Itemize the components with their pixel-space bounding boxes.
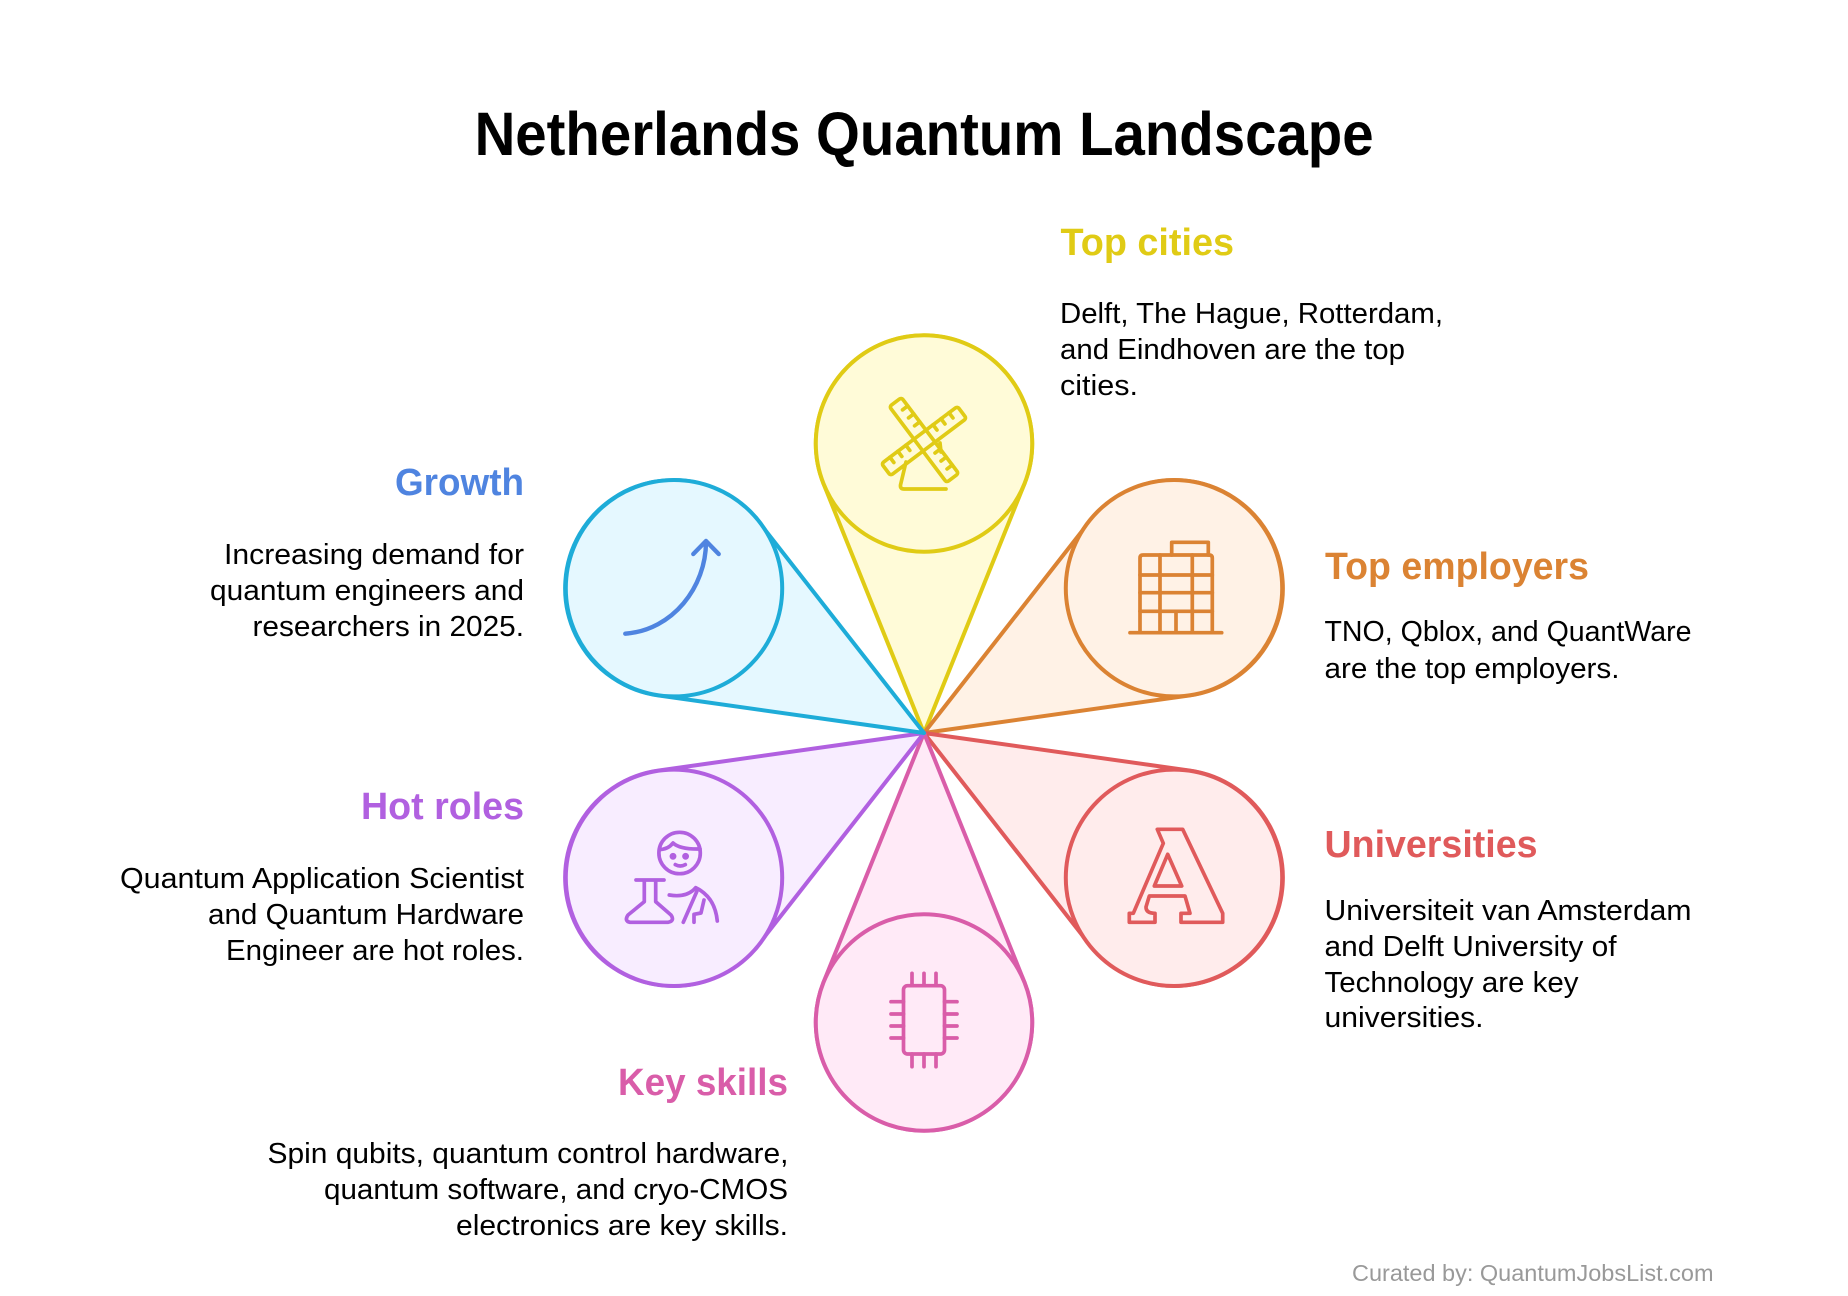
description: growth: quantum engineers and [210,575,524,607]
description: top employers [1324,616,1692,685]
description: top cities: cities. [1060,370,1138,402]
petal shape: blue [526,440,978,827]
description: hot roles [120,863,524,967]
text block: hot roles [120,786,524,967]
heading: hot roles: Hot roles [361,786,524,828]
heading: top cities: Top cities [1060,222,1234,264]
panel: hot roles petal [526,639,978,1026]
panel: key skills petal [816,733,1032,1131]
description: top employers: TNO, Qblox, and QuantWare [1324,616,1692,648]
description: hot roles: Quantum Application Scientist [120,863,524,895]
petal shape: orange [870,440,1322,827]
description: universities: Technology are key [1324,967,1579,999]
description: growth: researchers in 2025. [252,611,524,643]
heading: growth: Growth [395,462,524,504]
petal shape: purple [526,639,978,1026]
description: universities: universities. [1324,1002,1484,1034]
icon: office building [1130,542,1222,633]
petal shape: yellow [816,335,1032,733]
description: top cities: Delft, The Hague, Rotterdam, [1060,298,1443,330]
text block: key skills [268,1062,788,1242]
description: top employers: are the top employers. [1324,653,1620,685]
panel: universities petal [870,639,1322,1026]
description: hot roles: and Quantum Hardware [208,899,524,931]
heading: universities: Universities [1324,824,1538,866]
panel: growth petal [526,440,978,827]
description: universities [1324,895,1692,1034]
petal shape: pink [816,733,1032,1131]
icon: rising arrow [625,541,719,634]
text block: universities [1324,824,1692,1034]
text block: top cities [1060,222,1443,402]
description: key skills: quantum software, and cryo-CMOS [324,1174,788,1206]
panel: top employers petal [870,440,1322,827]
description: key skills: Spin qubits, quantum control hardware, [268,1138,788,1170]
panel: top cities petal [816,335,1032,733]
icon: microchip [891,973,957,1067]
text block: growth [210,462,524,643]
description: universities: and Delft University of [1324,931,1617,963]
description: hot roles: Engineer are hot roles. [226,935,524,967]
description: key skills [268,1138,788,1242]
description: growth [210,539,524,643]
description: top cities: and Eindhoven are the top [1060,334,1405,366]
description: top cities [1060,298,1443,402]
description: growth: Increasing demand for [224,539,524,571]
petal shape: red [870,639,1322,1026]
footer credit: Curated by: QuantumJobsList.com [1352,1260,1714,1286]
heading: top employers: Top employers [1325,546,1589,588]
description: universities: Universiteit van Amsterdam [1324,895,1692,927]
heading: key skills: Key skills [618,1062,788,1104]
icon: scientist with flask [626,832,717,922]
title: Netherlands Quantum Landscape [475,100,1374,168]
description: key skills: electronics are key skills. [456,1210,788,1242]
icon: windmill [882,398,966,489]
icon: letter A [1129,829,1223,922]
text block: top employers [1324,546,1692,685]
